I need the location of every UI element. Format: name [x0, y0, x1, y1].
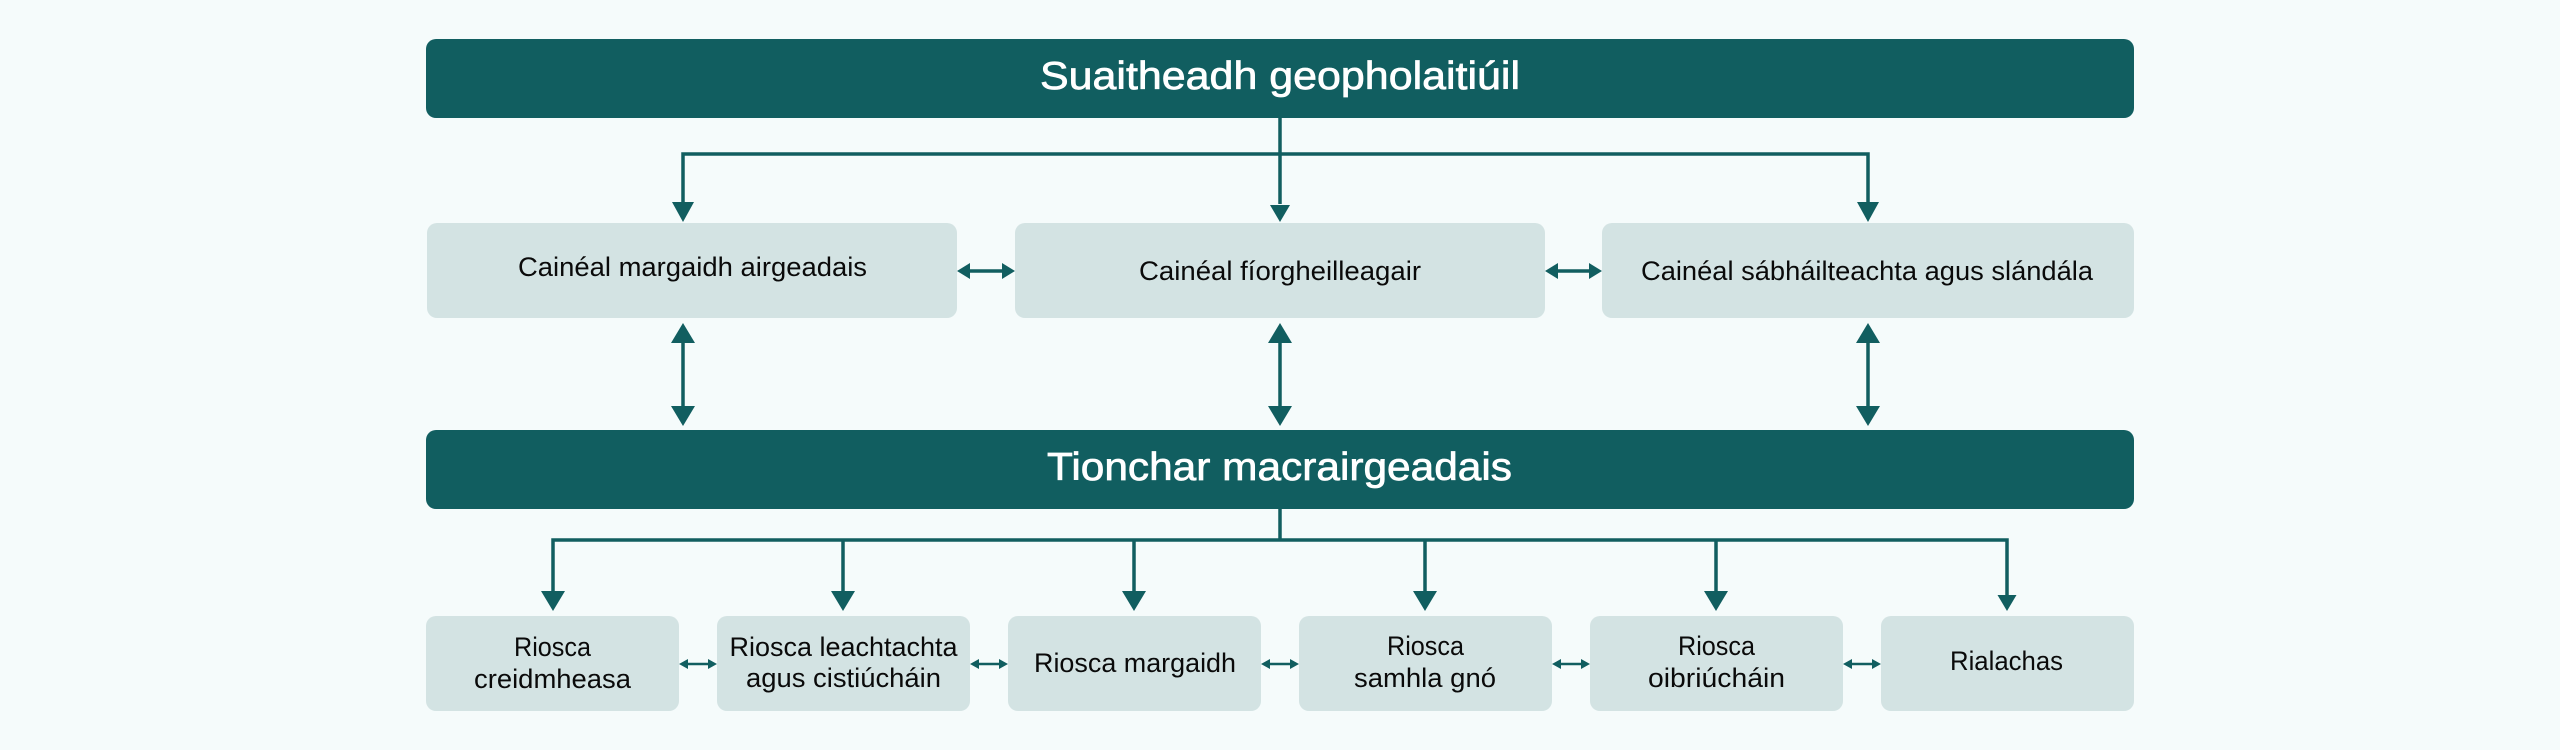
- box: credit risk: creidmheasa: [474, 664, 632, 694]
- box: operational risk: oibriúcháin: [1648, 663, 1785, 693]
- box: financial market channel: Cainéal margaidh airgeadais: [518, 252, 867, 282]
- box: business model risk: [1299, 616, 1552, 711]
- panel: macro-financial impact bar: [426, 430, 2134, 509]
- arrows: small double arrows between risks: [679, 659, 1881, 669]
- panel: risk boxes: [426, 616, 2134, 711]
- box: liquidity and funding risk: Riosca leachtachta: [730, 632, 958, 662]
- box: liquidity and funding risk: agus cistiúcháin: [746, 663, 941, 693]
- box: real economy channel: Cainéal fíorgheilleagair: [1139, 256, 1421, 286]
- panel: macro-financial impact bar: Tionchar macrairgeadais: [1047, 446, 1512, 489]
- arrows: macro impact to six risks: [541, 509, 2016, 611]
- box: governance: Rialachas: [1950, 646, 2063, 676]
- panel: channel boxes: [427, 223, 2134, 318]
- box: credit risk: [426, 616, 679, 711]
- panel: top heading bar: [426, 39, 2134, 118]
- box: business model risk: samhla gnó: [1354, 663, 1496, 693]
- box: governance: [1881, 616, 2134, 711]
- box: safety and security channel: Cainéal sábháilteachta agus slándála: [1641, 256, 2094, 286]
- box: liquidity and funding risk: [717, 616, 970, 711]
- box: safety and security channel: [1602, 223, 2134, 318]
- box: financial market channel: [427, 223, 957, 318]
- box: operational risk: [1590, 616, 1843, 711]
- box: business model risk: Riosca: [1387, 631, 1465, 661]
- panel: top heading bar: Suaitheadh geopholaitiúil: [1040, 55, 1520, 98]
- arrows: double arrows channels to macro impact: [671, 323, 1880, 426]
- box: real economy channel: [1015, 223, 1545, 318]
- box: market risk: [1008, 616, 1261, 711]
- box: credit risk: Riosca: [514, 632, 592, 662]
- arrows: heading to three channels: [672, 118, 1879, 222]
- arrows: double arrows between channels: [957, 263, 1602, 279]
- box: market risk: Riosca margaidh: [1034, 648, 1236, 678]
- box: operational risk: Riosca: [1678, 631, 1756, 661]
